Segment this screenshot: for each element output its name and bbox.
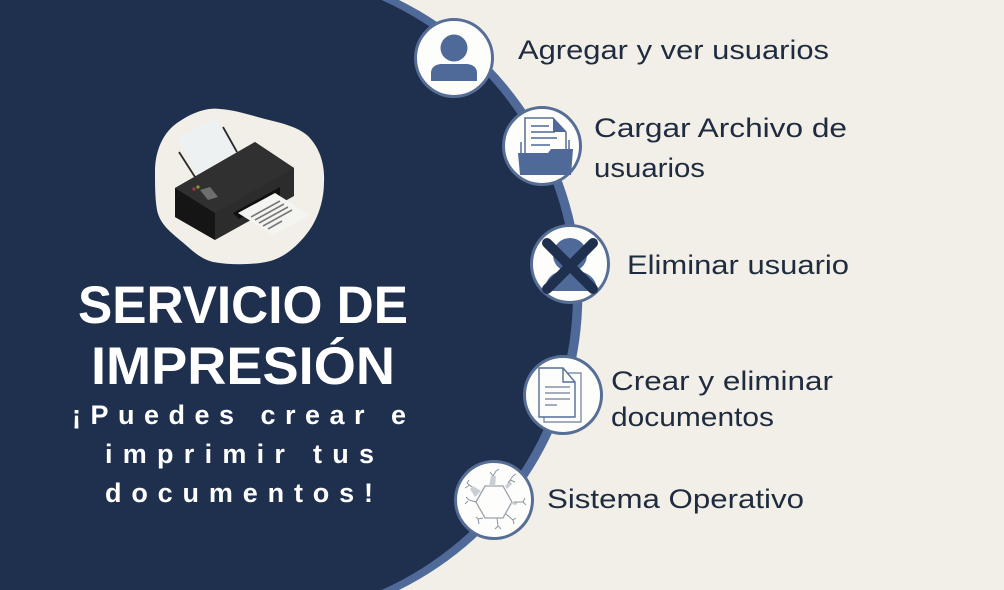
subtitle: ¡Puedes crear e (72, 400, 406, 430)
icon: printer on cream blob (155, 109, 324, 264)
large navy semicircle panel with blue ring (0, 0, 582, 590)
icon: delete user (532, 226, 608, 302)
label: Cargar Archivo de usuarios (594, 113, 847, 183)
label: Cargar Archivo de usuarios: Cargar Archivo de (594, 113, 847, 143)
icon: operating system hexagon (456, 462, 532, 538)
title: SERVICIO DE (78, 276, 408, 335)
icon: add user (416, 20, 492, 96)
label: Agregar y ver usuarios: Agregar y ver usuarios (518, 35, 829, 65)
subtitle (72, 400, 406, 508)
title (78, 276, 408, 396)
label: Crear y eliminar documentos (611, 366, 833, 432)
icon: documents (524, 356, 602, 434)
icon: folder with file (504, 108, 580, 184)
title: IMPRESIÓN (91, 336, 395, 396)
label: Sistema Operativo: Sistema Operativo (547, 484, 804, 514)
subtitle: imprimir tus (105, 439, 374, 469)
label: Eliminar usuario: Eliminar usuario (627, 250, 849, 280)
label: Crear y eliminar documentos: documentos (611, 402, 774, 432)
label: Cargar Archivo de usuarios: usuarios (594, 153, 705, 183)
subtitle: documentos! (105, 478, 373, 508)
label: Crear y eliminar documentos: Crear y eliminar (611, 366, 833, 396)
